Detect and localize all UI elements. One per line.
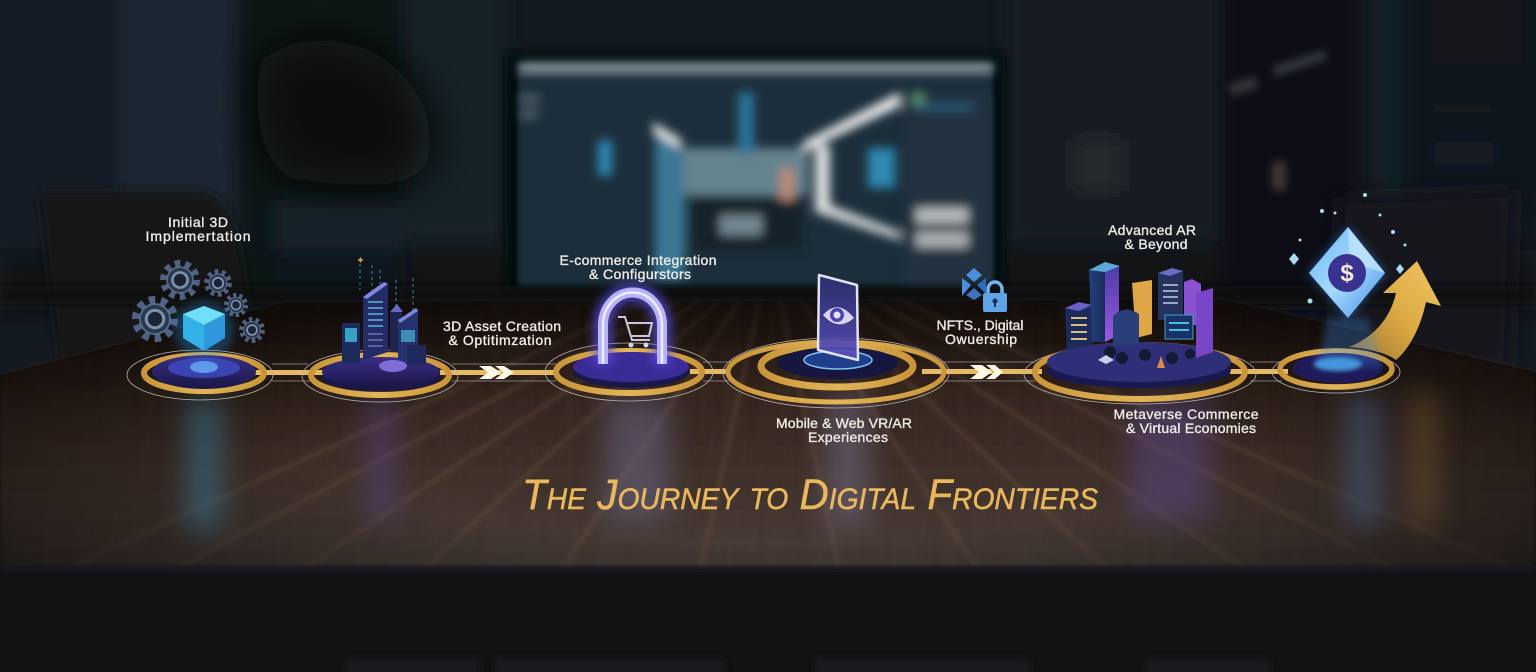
label: initial 3D implementation: Initial 3D: [168, 214, 228, 230]
platform ring: [1024, 342, 1256, 404]
window reflections: [1228, 50, 1328, 190]
label: 3D asset creation: & Optitimzation: [448, 332, 552, 348]
icon: metaverse city: [1065, 262, 1213, 368]
platform ring: [545, 343, 713, 401]
icon: growth arrow: [1349, 261, 1441, 360]
right chair: [1330, 190, 1515, 370]
icon: diamond dollar token: [1309, 227, 1385, 318]
label: metaverse commerce: & Virtual Economies: [1126, 420, 1256, 436]
label: mobile and web VR/AR: Experiences: [808, 429, 888, 445]
label: 3D asset creation: 3D Asset Creation: [443, 318, 561, 334]
icon: light beam: [1316, 318, 1382, 366]
monitor showing blurred 3D showroom: [505, 52, 1005, 292]
left chair: [38, 192, 260, 370]
step 6: advanced AR and metaverse commerce: [1024, 222, 1259, 436]
label: initial 3D implementation: Implemertation: [146, 228, 250, 244]
platform ring: [302, 350, 458, 402]
holographic reflections on table: [187, 395, 1436, 530]
step 5: NFTs and digital ownership: [936, 268, 1024, 347]
arrow chevrons 2: [970, 365, 1003, 379]
icon: hologram city: [342, 258, 426, 372]
journey connector track: [255, 362, 1288, 381]
icon: gears and cube: [136, 264, 262, 358]
step 4: mobile and web VR/AR: [723, 275, 949, 445]
label: e-commerce integration: & Configurstors: [589, 266, 691, 282]
platform ring: [127, 350, 273, 400]
icon: phone with eye: [818, 275, 858, 360]
label: metaverse commerce: Metaverse Commerce: [1114, 406, 1259, 422]
fan wood streaks: [230, 308, 1337, 564]
label: NFTs digital ownership: Owuership: [945, 331, 1017, 347]
plant silhouette: [257, 40, 431, 185]
arrow chevrons 1: [479, 366, 514, 379]
label: e-commerce integration: E-commerce Integration: [560, 252, 716, 268]
label: NFTs digital ownership: NFTS., Digital: [936, 317, 1024, 333]
step 2: 3D asset creation: [302, 258, 561, 402]
step 7: growth token: [1272, 193, 1441, 393]
label: advanced AR and beyond: & Beyond: [1124, 236, 1188, 252]
title: The Journey to Digital Frontiers: [522, 471, 1098, 519]
label: advanced AR and beyond: Advanced AR: [1108, 222, 1196, 238]
icon: sparkle diamonds: [1289, 193, 1406, 304]
icon: portal with shopping cart: [603, 292, 662, 364]
wooden table: [0, 286, 1536, 576]
step 3: e-commerce integration: [545, 252, 716, 401]
icon: diamond dollar token: $: [1340, 260, 1354, 287]
platform ring: [1272, 351, 1400, 393]
icon: NFT cube: [962, 268, 986, 300]
icon: padlock: [983, 282, 1007, 312]
platform rings: [723, 338, 949, 408]
label: mobile and web VR/AR: Mobile & Web VR/AR: [776, 415, 912, 431]
dark foreground below table: [0, 566, 1536, 672]
step 1: initial 3D implementation: [127, 214, 273, 400]
